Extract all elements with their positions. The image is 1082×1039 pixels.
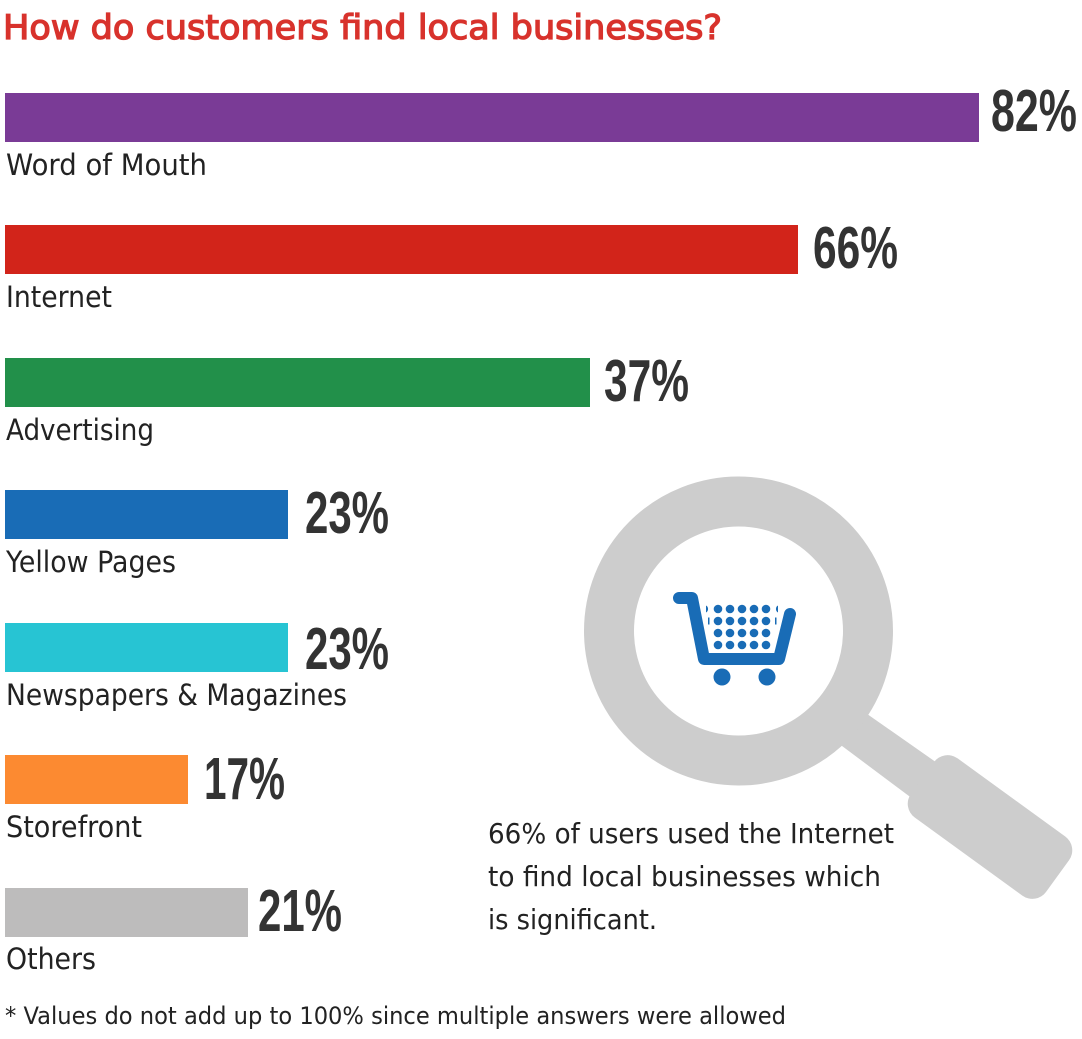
- row: Others: [5, 878, 342, 976]
- row: Internet: [5, 215, 898, 314]
- row: Yellow Pages: 23%: [305, 480, 389, 546]
- icon: shopping cart: [679, 598, 790, 686]
- callout: to find local businesses which: [488, 860, 881, 893]
- row: Advertising: 37%: [604, 348, 689, 414]
- row: Storefront: [5, 746, 285, 844]
- row: Advertising: Advertising: [6, 413, 154, 447]
- row: Internet: 66%: [813, 215, 898, 281]
- callout: [488, 817, 894, 936]
- row: Internet: Internet: [6, 280, 112, 314]
- row: Storefront: 17%: [204, 746, 285, 812]
- row: Yellow Pages: Yellow Pages: [5, 545, 176, 579]
- row: Yellow Pages: [5, 480, 389, 579]
- row: Advertising: [5, 348, 689, 447]
- row: Newspapers & Magazines: [5, 616, 389, 712]
- row: Newspapers & Magazines: Newspapers & Magazines: [6, 678, 347, 712]
- row: Word of Mouth: [5, 78, 1077, 182]
- icon: magnifying glass: [609, 502, 1079, 906]
- row: Newspapers & Magazines: 23%: [305, 616, 389, 682]
- footnote: * Values do not add up to 100% since multiple answers were allowed: [5, 1002, 786, 1030]
- row: Word of Mouth: Word of Mouth: [6, 148, 207, 182]
- title: How do customers find local businesses?: [3, 8, 722, 48]
- row: Others: 21%: [258, 878, 342, 944]
- row: Others: Others: [6, 942, 96, 976]
- callout: is significant.: [488, 903, 657, 936]
- callout: 66% of users used the Internet: [488, 817, 894, 850]
- row: Storefront: Storefront: [6, 810, 142, 844]
